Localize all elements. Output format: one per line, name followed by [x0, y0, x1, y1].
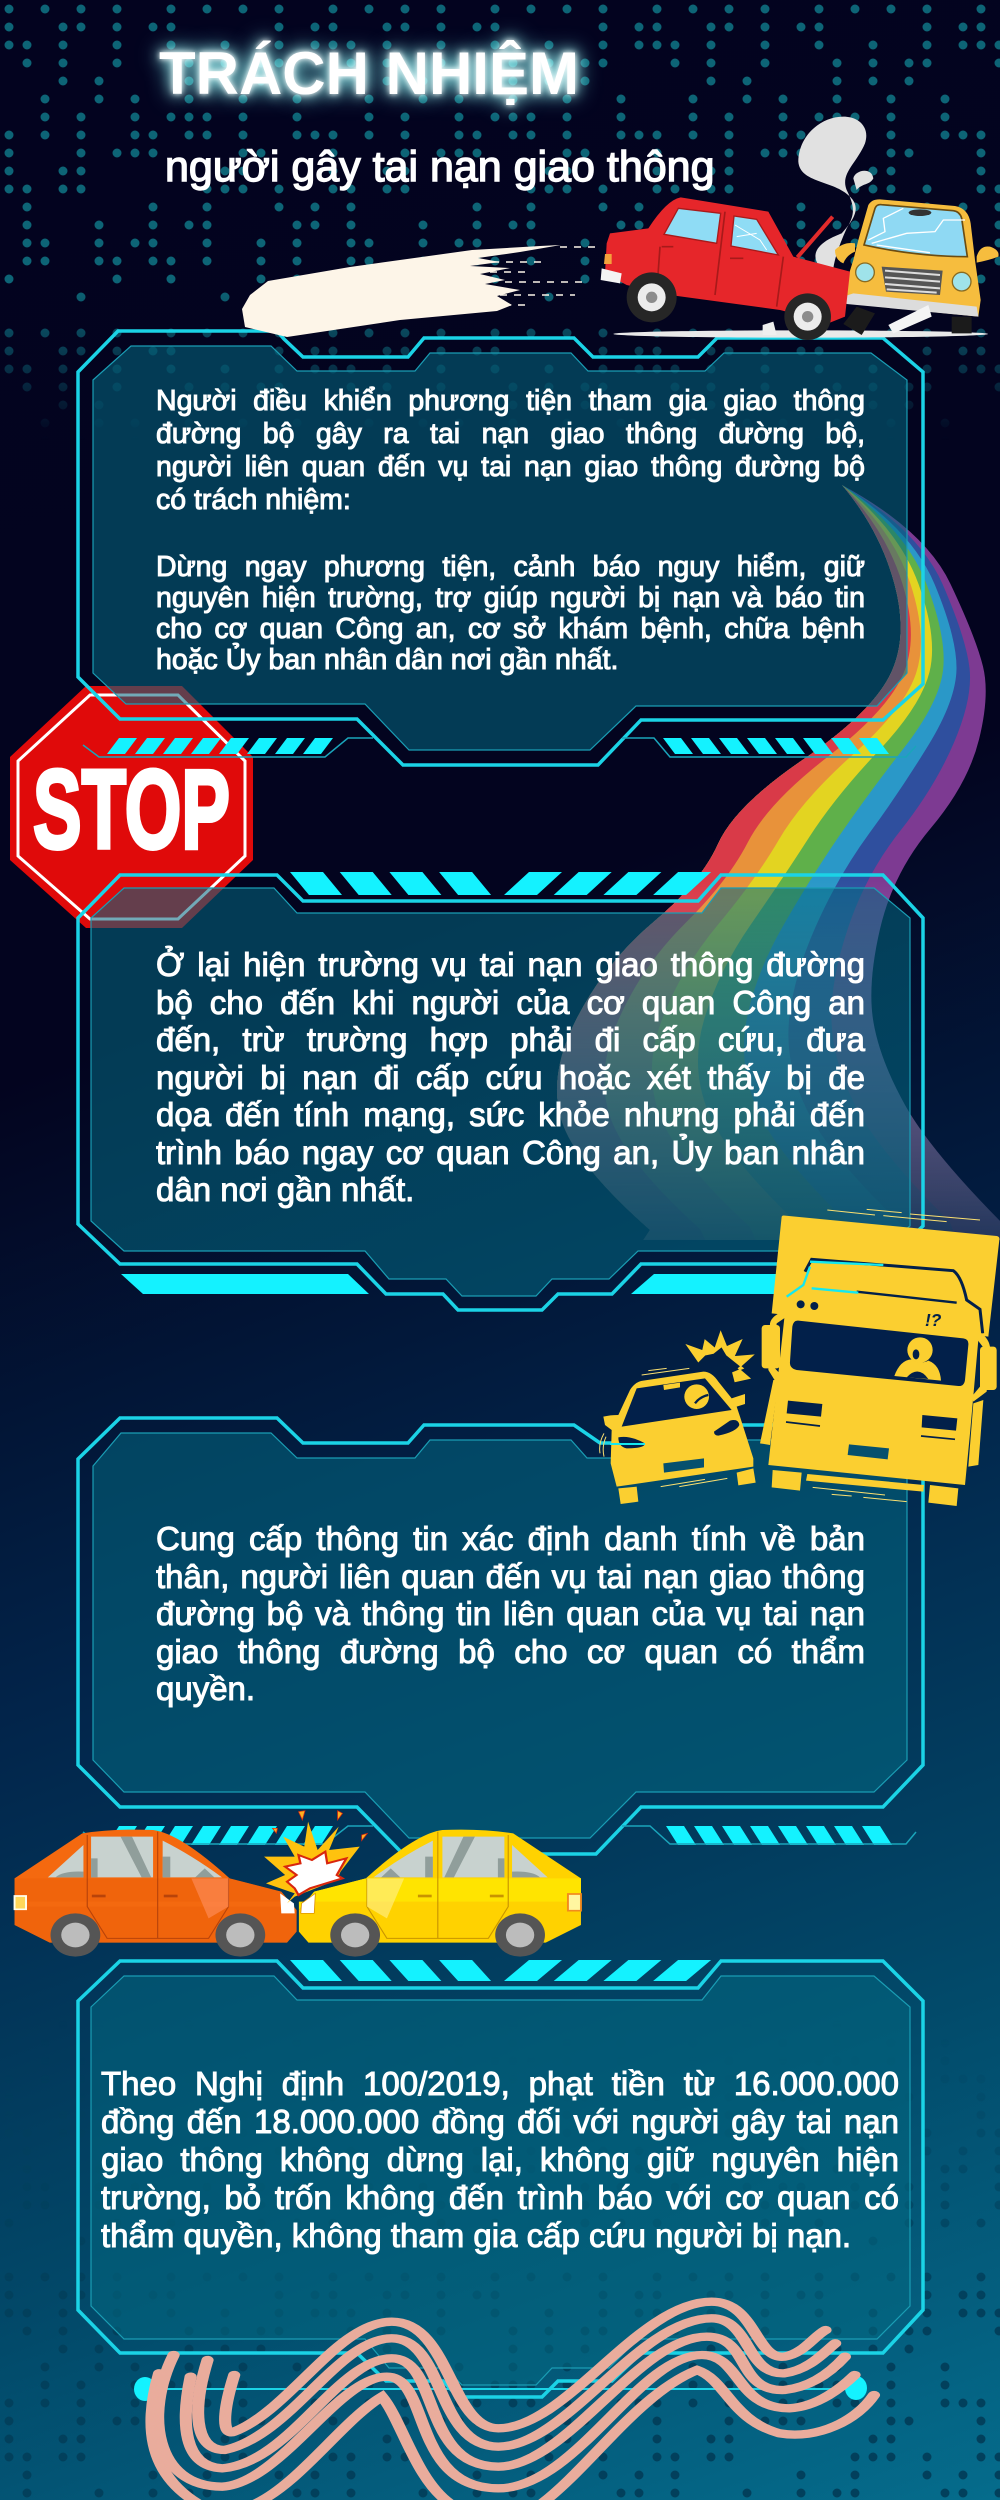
yellow car	[835, 199, 999, 335]
panel 4 frame	[78, 1960, 923, 2397]
rainbow ribbon	[556, 485, 1000, 1240]
text block: panel 1: có trách nhiệm:	[156, 484, 351, 516]
text block: panel 3: Cung cấp thông tin xác định danh tính về bản	[156, 1520, 865, 1557]
subtitle: người gây tai nạn giao thông	[165, 143, 714, 191]
text block: panel 4	[101, 2065, 899, 2254]
stop sign	[10, 686, 253, 928]
pink wavy brush strokes	[151, 2302, 874, 2500]
text block: panel 1: người liên quan đến vụ tai nạn giao thông đường bộ	[156, 451, 865, 483]
text block: panel 3: đường bộ và thông tin liên quan của vụ tai nạn	[156, 1595, 865, 1632]
red car	[601, 197, 850, 340]
illustration: two cars head-on collision	[15, 1811, 581, 1957]
text block: panel 1: cho cơ quan Công an, cơ sở khám bệnh, chữa bệnh	[156, 613, 865, 645]
text block: panel 2	[156, 946, 866, 1208]
panel 3 frame	[78, 1418, 923, 1854]
text block: panel 2: bộ cho đến khi người của cơ quan Công an	[156, 984, 865, 1020]
connector line with end dots	[134, 2376, 867, 2401]
text block: panel 4: giao thông không dừng lại, không giữ nguyên hiện	[101, 2141, 899, 2178]
text block: panel 2: trình báo ngay cơ quan Công an, Ủy ban nhân	[156, 1134, 865, 1170]
text block: panel 2: người bị nạn đi cấp cứu hoặc xét thấy bị đe	[156, 1058, 865, 1096]
text block: panel 3: thân, người liên quan đến vụ tai nạn giao thông	[156, 1558, 865, 1594]
dot pattern: bottom	[4, 2129, 1000, 2498]
text block: panel 1: đường bộ gây ra tai nạn giao thông đường bộ,	[156, 418, 865, 450]
text block: panel 4: thẩm quyền, không tham gia cấp cứu người bị nạn.	[101, 2217, 851, 2254]
text block: panel 1: Dừng ngay phương tiện, cảnh báo nguy hiểm, giữ	[156, 551, 865, 583]
truck: !?	[925, 1310, 942, 1330]
text block: panel 1	[156, 385, 865, 676]
text block: panel 4: trường, bỏ trốn không đến trình báo với cơ quan có	[101, 2179, 899, 2216]
title: TRÁCH NHIỆM	[159, 40, 579, 107]
panel 2 frame	[78, 872, 923, 1310]
text block: panel 1: Người điều khiển phương tiện tham gia giao thông	[156, 385, 865, 417]
road shadow	[613, 330, 988, 338]
orange car	[15, 1830, 297, 1957]
yellow car	[299, 1830, 581, 1957]
smoke	[798, 117, 866, 268]
text block: panel 2: dọa đến tính mạng, sức khỏe nhưng phải đến	[156, 1096, 865, 1133]
text block: panel 3: giao thông đường bộ cho cơ quan có thẩm	[156, 1632, 865, 1670]
text block: panel 2: dân nơi gần nhất.	[156, 1171, 414, 1208]
dot pattern: top	[0, 0, 1000, 440]
text block: panel 1: hoặc Ủy ban nhân dân nơi gần nhất.	[156, 644, 618, 676]
text block: panel 4: đồng đến 18.000.000 đồng đối với người gây tai nạn	[101, 2103, 899, 2140]
text block: panel 2: Ở lại hiện trường vụ tai nạn giao thông đường	[156, 946, 865, 983]
panel 1 frame	[78, 331, 923, 765]
brush stroke	[242, 245, 600, 337]
stop sign: STOP	[33, 747, 230, 872]
explosion	[264, 1811, 367, 1903]
text block: panel 4: Theo Nghị định 100/2019, phạt tiền từ 16.000.000	[101, 2065, 899, 2102]
illustration: red car crashing into yellow car	[601, 117, 999, 340]
text block: panel 3	[156, 1520, 865, 1708]
text block: panel 3: quyền.	[156, 1670, 255, 1707]
truck	[760, 1209, 999, 1506]
illustration: truck and small car	[600, 1209, 999, 1506]
text block: panel 2: đến, trừ trường hợp phải đi cấp cứu, đưa	[156, 1021, 865, 1058]
small car	[600, 1332, 756, 1504]
text block: panel 1: nguyên hiện trường, trợ giúp người bị nạn và báo tin	[156, 582, 865, 614]
